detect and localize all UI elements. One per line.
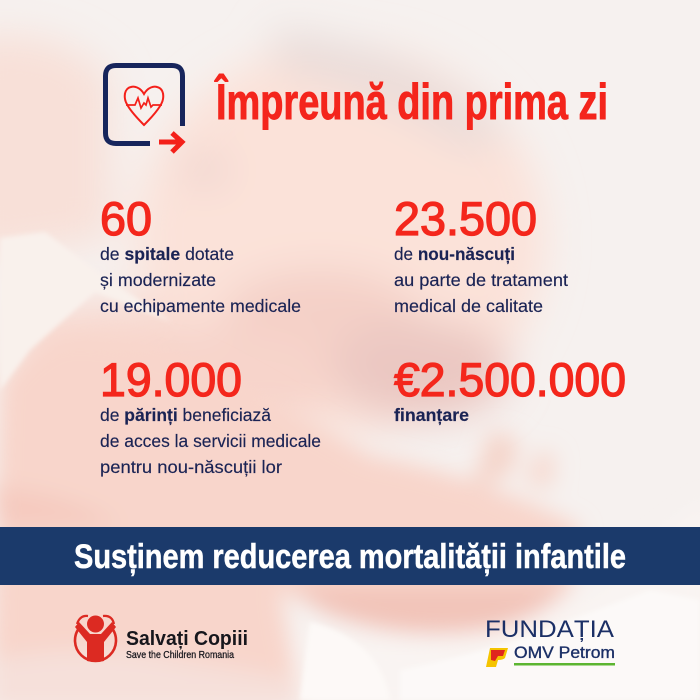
stat: 23.500 newborns: au parte de tratament bbox=[394, 270, 568, 290]
stat: 2.500.000 euro funding: €2.500.000 bbox=[394, 353, 626, 406]
logo: Salvați Copiii: Save the Children Romania bbox=[126, 650, 234, 661]
stat: 2.500.000 euro funding: finanțare bbox=[394, 405, 469, 425]
stat: 60 hospitals: de spitale dotate bbox=[100, 244, 234, 264]
stat: 19.000 parents bbox=[100, 353, 321, 477]
stat: 23.500 newborns bbox=[394, 192, 568, 316]
logo: Salvați Copiii: Salvați Copiii bbox=[126, 627, 248, 650]
stat: 23.500 newborns: de nou-născuți bbox=[394, 244, 515, 264]
stat: 19.000 parents: de acces la servicii medicale bbox=[100, 431, 321, 451]
stat: 60 hospitals: și modernizate bbox=[100, 270, 216, 290]
stat: 60 hospitals: 60 bbox=[100, 192, 152, 245]
stat: 60 hospitals: cu echipamente medicale bbox=[100, 296, 301, 316]
logo: Fundația OMV Petrom: FUNDAȚIA bbox=[485, 616, 614, 643]
stat: 19.000 parents: 19.000 bbox=[100, 353, 242, 406]
icon: heart monitor with arrow bbox=[106, 66, 182, 152]
stat: 60 hospitals bbox=[100, 192, 301, 316]
banner bbox=[0, 527, 700, 585]
logo: Salvați Copiii bbox=[75, 616, 248, 662]
logo: Fundația OMV Petrom: OMV Petrom bbox=[514, 644, 615, 662]
stat: 19.000 parents: pentru nou-născuții lor bbox=[100, 457, 282, 477]
stat: 19.000 parents: de părinți beneficiază bbox=[100, 405, 271, 425]
stat: 23.500 newborns: 23.500 bbox=[394, 192, 537, 245]
stat: 23.500 newborns: medical de calitate bbox=[394, 296, 543, 316]
logo: Fundația OMV Petrom bbox=[485, 616, 615, 667]
decorative sleeve bbox=[0, 232, 172, 390]
